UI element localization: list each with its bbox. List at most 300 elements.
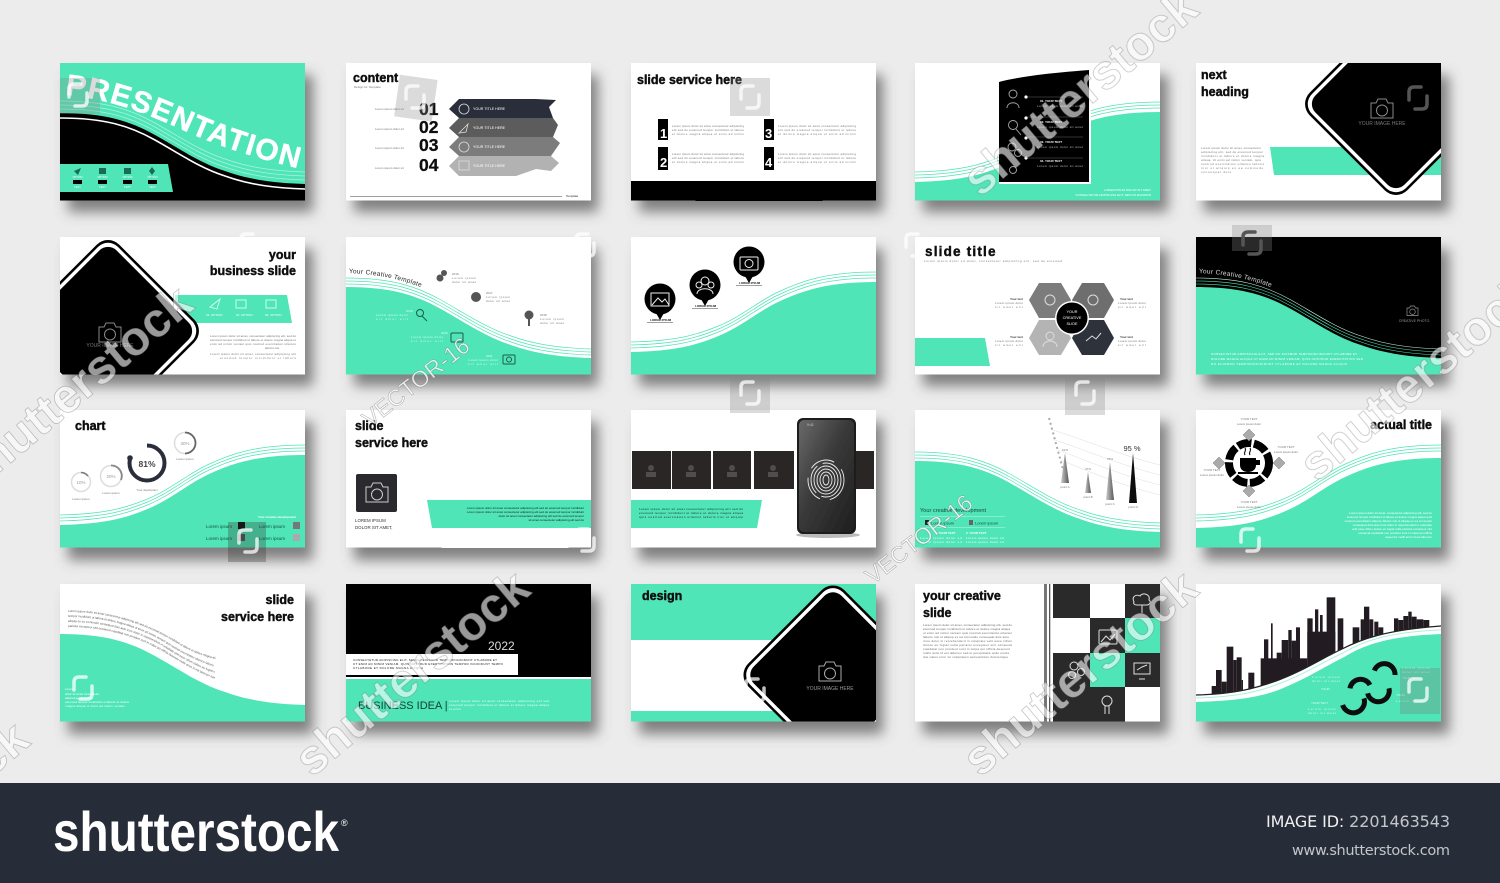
titles: slide	[266, 593, 294, 607]
body text: laboris nisi ut aliquip ex ea commodo consequat duis aute	[923, 635, 1009, 639]
diagram captions: Lorem ipsum dolor	[1200, 473, 1224, 477]
icon strip: OPTION	[73, 175, 83, 179]
phone: 9:41	[807, 423, 814, 427]
footer caption: LOREM IPSUM DOLOR SIT AMET	[1104, 188, 1151, 192]
mint band text: eiusmod tempor incididunt ut labore et dolore magna aliqua	[639, 511, 743, 515]
black list card	[999, 70, 1089, 182]
body text	[1345, 511, 1432, 539]
title: design	[642, 589, 682, 603]
panel: three circle icons slide	[631, 237, 876, 377]
diagram captions	[1200, 417, 1298, 509]
panel: chart slide: 30%	[180, 441, 190, 446]
body text: Lorem ipsum dolor sit amet, consectetur	[1201, 146, 1261, 150]
hexagon captions: Your text	[1010, 335, 1023, 339]
legend: Lorem ipsum	[206, 524, 232, 529]
circle markers	[644, 246, 764, 323]
coffee ring diagram	[1213, 429, 1285, 497]
icon strip: OPTION	[123, 175, 133, 179]
numbered list	[420, 102, 439, 172]
list captions	[375, 107, 404, 170]
caption: magna aliqua ut enim ad minim veniam	[65, 704, 126, 708]
panel: phone fingerprint slide	[631, 410, 876, 548]
hexagon diagram: CREATIVE	[1063, 316, 1082, 320]
panel: black infographic list slide: Lorem ipsum dolor sit amet	[1037, 125, 1083, 129]
panel: creative template timeline slide: 2021	[486, 354, 493, 358]
body text	[672, 124, 856, 164]
curved body text: aliquip ex ea commodo consequat duis aute irure dolor in reprehenderit in voluptate velit esse cillum dolore eu fugiat nulla	[68, 620, 215, 673]
body text: eiusmod tempor incididunt ut labore et dolore magna aliqua quis	[1347, 515, 1432, 519]
hexagon captions: Lorem ipsum dolor	[1118, 301, 1146, 305]
captions: Lorem ipsum	[1308, 707, 1336, 711]
panel: black infographic list slide: 03. YOUR TEXT	[1040, 140, 1062, 144]
hexagon captions: sit amet elit	[1118, 343, 1146, 347]
mint band text	[639, 507, 743, 519]
numbered list: 04	[419, 155, 439, 175]
checker grid	[1053, 584, 1160, 722]
body text: mollit anim id est laborum sed ut perspiciatis unde omnis	[923, 651, 1010, 655]
panel: next heading slide	[1196, 63, 1441, 200]
panel: creative template timeline slide	[346, 237, 591, 374]
panel: design slide: YOUR IMAGE HERE	[806, 686, 854, 692]
panel: business idea 2022 slide: ut enim	[449, 707, 462, 711]
timeline captions: Lorem ipsum	[452, 276, 476, 280]
panel: creative template timeline slide: Lorem ipsum dolor	[468, 358, 498, 362]
body text: et dolore magna aliqua ut enim ad minim	[778, 160, 856, 164]
panel: slide service here wave text	[60, 584, 305, 722]
timeline captions: dolor sit amet	[486, 299, 510, 303]
numbered blocks: 1	[660, 126, 667, 141]
body text: et dolore magna aliqua ut enim ad minim	[778, 132, 856, 136]
diagram captions: Lorem ipsum dolor	[1237, 422, 1261, 426]
triangle bars	[1060, 444, 1141, 509]
panel: chart slide: Lorem ipsum	[102, 491, 120, 495]
photo placeholder	[356, 474, 397, 512]
panel: presentation cover slide	[60, 63, 305, 200]
captions: YOUR	[1396, 693, 1406, 697]
body text: deserunt mollit anim id est laborum	[1385, 535, 1432, 539]
mint band with text: sit amet consectetur adipiscing elit sed do	[528, 518, 584, 522]
body text: et dolore magna aliqua ut enim ad minim	[672, 132, 744, 136]
body text	[923, 623, 1012, 659]
band icons: 02. OPTION	[236, 313, 253, 317]
title: slide title	[925, 244, 997, 259]
hexagon captions: Your text	[1120, 297, 1133, 301]
title: content	[353, 71, 399, 85]
body text: elit sed do eiusmod tempor incididunt ut labore	[778, 128, 856, 132]
body text: consequat duis aute irure dolor in reprehenderit in voluptate	[1353, 523, 1432, 527]
watermark: vector-16: VECTOR-16	[860, 489, 977, 589]
panel: black infographic list slide: 04. YOUR TEXT	[1040, 159, 1062, 163]
timeline icons	[436, 270, 534, 326]
panel: your creative slide checker grid	[915, 584, 1160, 722]
panel: slide title hexagon slide: Lorem ipsum dolor sit amet, consectetur adipiscing elit, sed do eiusmod	[924, 259, 1062, 263]
body text: iste natus error sit voluptatem accusantium doloremque	[923, 655, 1008, 659]
diagram captions: Lorem ipsum dolor	[1274, 450, 1298, 454]
body text: adipiscing elit, sed do eiusmod tempor	[1201, 150, 1263, 154]
numbered list: 03	[419, 135, 439, 155]
icon: fingerprint	[808, 460, 844, 500]
icon strip: OPTION	[148, 175, 158, 179]
panel: your business slide: YOUR IMAGE HERE	[86, 343, 134, 349]
titles	[210, 252, 296, 276]
panel: slide service here	[631, 63, 876, 201]
mint band with text	[427, 500, 591, 528]
title: actual title	[1370, 418, 1432, 432]
footer logo: shutterstock	[53, 800, 340, 863]
legend: Lorem ipsum	[259, 524, 285, 529]
mint band text: Lorem ipsum dolor sit amet consectetur adipiscing elit sed do	[639, 507, 743, 511]
panel: chart slide: Lorem ipsum	[176, 457, 194, 461]
curved body text	[68, 610, 216, 679]
image id: IMAGE ID: 2201463543	[1266, 812, 1450, 831]
captions	[1308, 666, 1430, 715]
body text: ut enim ad minim veniam quis nostrud exercitation ullamco	[923, 631, 1012, 635]
curved title: Your Creative Template	[1199, 268, 1272, 287]
triangle bars: 95 %	[1123, 444, 1141, 453]
timeline captions: 2017	[486, 291, 493, 295]
panel: chart slide: Lorem ipsum	[72, 497, 90, 501]
titles: your	[269, 248, 296, 262]
footer caption: CONSECTETUR ADIPISCING ELIT, SED DO EIUSMOD	[1075, 193, 1152, 197]
icon strip: OPTION	[98, 175, 108, 179]
body text: occaecat cupidatat non proident sunt in culpa qui officia	[1358, 531, 1432, 535]
panel: content slide: Design for Template	[354, 85, 381, 89]
body text: velit esse cillum dolore eu fugiat nulla pariatur excepteur sint	[1352, 527, 1432, 531]
hexagon captions: Lorem ipsum dolor	[995, 339, 1023, 343]
panel: actual title coffee diagram slide	[1196, 410, 1441, 553]
chart grid	[1049, 418, 1160, 495]
body text: et dolore magna aliqua ut enim ad minim	[672, 160, 744, 164]
panel: creative template timeline slide: sit amet elit	[411, 339, 443, 343]
mint band with text: Lorem ipsum dolor sit amet consectetur adipiscing elit sed do eiusmod tempor incididunt	[467, 506, 584, 510]
numbered blocks: 2	[660, 155, 667, 170]
chart legend: 2. YOUR TEXT	[966, 531, 987, 535]
list captions: Lorem ipsum dolor sit	[375, 107, 404, 111]
titles: heading	[1201, 85, 1249, 99]
curved body text: Lorem ipsum dolor sit amet consectetur adipiscing elit sed do eiusmod tempor incididunt ut labore et dolore magna aliqua ut enim	[68, 610, 216, 659]
hexagon captions: sit amet elit	[1118, 305, 1146, 309]
diagram captions: YOUR TEXT	[1240, 500, 1258, 504]
watermark: vector-16	[357, 332, 977, 589]
triangle bars: 75%	[1107, 457, 1113, 461]
image placeholder diamond	[737, 579, 929, 771]
body text	[210, 334, 296, 360]
panel: business idea 2022 slide: eiusmod tempor incididunt ut labore et dolore magna aliqua	[449, 703, 549, 707]
body text: Lorem ipsum dolor sit amet consectetur adipiscing	[778, 152, 856, 156]
timeline captions: dolor sit amet	[540, 321, 564, 325]
panel: dark creative template slide: CREATIVE PHOTO	[1399, 319, 1430, 323]
body text	[1211, 353, 1363, 366]
watermark: shutterstock diagonals: shutterstock	[953, 560, 1208, 786]
timeline captions: Lorem ipsum	[486, 295, 510, 299]
titles: business slide	[210, 264, 296, 278]
circle markers: LOREM IPSUM	[650, 318, 672, 322]
titles: your creative	[923, 589, 1001, 603]
captions: dolor sit amet	[1312, 679, 1340, 683]
panel: triangle bar chart slide	[915, 410, 1160, 551]
captions: YOUR	[1321, 687, 1331, 691]
band icons: 03. OPTION	[265, 313, 282, 317]
body text: elit sed do eiusmod tempor incididunt ut labore	[672, 128, 744, 132]
curved body text: pariatur excepteur sint occaecat cupidatat non proident sunt in culpa qui officia deserunt mollit anim id est laborum lorem	[68, 624, 215, 679]
panel: content slide	[346, 63, 591, 201]
white text box: CONSECTETUR ADIPISCING ELIT, SED DO EIUSMOD TEMPORINCIDIDUNT UTLABORE ET	[353, 658, 497, 662]
triangle bars: 61%	[1062, 448, 1068, 452]
city skyline	[1212, 597, 1429, 730]
captions: dolor sit amet	[1308, 711, 1336, 715]
panel: slide service photo block: DOLOR SIT AMET,	[355, 525, 392, 530]
diagram captions: YOUR TEXT	[1203, 468, 1221, 472]
panel: creative template timeline slide: sit amet elit	[376, 317, 408, 321]
caption: eiusmod tempor incididunt ut labore et dolore	[65, 700, 129, 704]
panel: creative template timeline slide: Lorem ipsum dolor	[411, 335, 443, 339]
numbered list: 01	[419, 99, 439, 119]
body text: nisi ut aliquip ex ea commodo	[1201, 166, 1263, 170]
panel: business idea 2022 slide	[346, 584, 591, 722]
panel: slide service photo block: LOREM IPSUM	[355, 518, 386, 523]
panel: black infographic list slide	[915, 63, 1160, 207]
chart legend	[920, 508, 1005, 544]
panel: dark creative template slide	[1196, 237, 1441, 374]
chart legend: 1. YOUR TEXT	[935, 531, 956, 535]
panel: black infographic list slide: 01. YOUR TEXT	[1040, 99, 1062, 103]
arrow stack: YOUR TITLE HERE	[473, 107, 506, 111]
caption: dolor sit amet consectetur	[65, 692, 99, 696]
icon strip: TEXT	[124, 185, 131, 189]
mint band text: quis nostrud exercitation ullamco laboris nisi ut aliquip	[639, 515, 743, 519]
arrow stack: YOUR TITLE HERE	[473, 126, 506, 130]
panel: next heading slide: YOUR IMAGE HERE	[1358, 121, 1406, 127]
body text: elit sed do eiusmod tempor incididunt ut labore	[778, 156, 856, 160]
panel: design slide	[631, 579, 929, 771]
titles: slide	[923, 606, 952, 620]
body text: consequat duis	[1201, 170, 1232, 174]
numbered blocks	[658, 119, 774, 170]
triangle bars: point D	[1128, 505, 1139, 509]
captions: Lorem ipsum	[1312, 675, 1340, 679]
body text: elit sed do eiusmod tempor incididunt ut labore	[672, 156, 744, 160]
arrow stack	[449, 99, 560, 176]
arrow stack: YOUR TITLE HERE	[473, 145, 506, 149]
slide drop shadows	[68, 75, 1449, 734]
hexagon captions: Lorem ipsum dolor	[995, 301, 1023, 305]
panel: content slide: Template	[566, 194, 579, 198]
titles	[221, 593, 294, 624]
captions: YOUR TEXT	[1311, 701, 1328, 705]
panel: slide title hexagon slide	[915, 237, 1160, 375]
caption: Lorem	[65, 687, 74, 691]
legend: Lorem ipsum	[206, 536, 232, 541]
panel: creative template timeline slide: Lorem ipsum dolor	[376, 313, 408, 317]
body text: Lorem ipsum dolor sit amet consectetur adipiscing	[672, 124, 744, 128]
list captions: Lorem ipsum dolor sit	[375, 146, 404, 150]
icon strip: TEXT	[99, 185, 106, 189]
body text: nostrud exercitation ullamco laboris nisi ut aliquip ex ea commodo	[1345, 519, 1432, 523]
body text: aliqua. Ut enim ad minim veniam, quis	[1201, 158, 1262, 162]
watermark: shutterstock diagonals: shutterstock	[285, 560, 540, 786]
titles: service here	[355, 436, 428, 450]
body text: incididunt ut labore et dolore magna	[1201, 154, 1264, 158]
curved title: Your Creative Template	[349, 268, 422, 287]
year: 2022	[488, 639, 515, 653]
panel: skyline slide	[1196, 584, 1441, 730]
panel: black infographic list slide: Lorem ipsum dolor sit amet	[1037, 145, 1083, 149]
icon strip: TEXT	[74, 185, 81, 189]
chain icon	[1343, 664, 1395, 713]
chart legend: Lorem ipsum dolor sit	[966, 540, 1004, 544]
body text: irure dolor in reprehenderit in voluptate velit esse cillum	[923, 639, 1013, 643]
panel: creative template timeline slide: 2019	[406, 309, 413, 313]
chart legend: Lorem ipsum dolor sit	[920, 540, 962, 544]
watermark: bracket logos	[60, 75, 1440, 714]
title: slide service here	[637, 73, 742, 87]
caption: adipiscing elit sed do	[65, 696, 93, 700]
footer caption	[1076, 189, 1151, 196]
body text: Lorem ipsum dolor sit amet, consectetur adipiscing elit	[210, 352, 296, 356]
band icons: 01. OPTION	[206, 313, 223, 317]
phone	[796, 418, 860, 538]
site url: www.shutterstock.com	[1292, 843, 1450, 859]
hexagon diagram	[1029, 283, 1114, 355]
hexagon captions: Your text	[1010, 297, 1023, 301]
photo strip	[632, 451, 874, 489]
body text: nostrud exercitation ullamco laboris	[1201, 162, 1265, 166]
panel: business idea 2022 slide: Lorem ipsum dolor sit amet consectetur adipiscing elit sed	[449, 699, 549, 703]
chart legend: Lorem ipsum dolor sit	[966, 536, 1004, 540]
panel: chart slide: 81%	[138, 459, 156, 469]
image placeholder diamond	[1305, 63, 1441, 195]
panel: chart slide: Your description	[136, 488, 158, 492]
footer title: BUSINESS IDEA |	[358, 700, 448, 712]
chart legend: Lorem ipsum	[931, 520, 955, 526]
hexagon diagram: YOUR	[1067, 310, 1078, 314]
footer bar: ®	[341, 818, 348, 828]
watermark: vector-16: VECTOR-16	[357, 332, 474, 432]
slide grid	[60, 63, 1441, 722]
triangle bars: point B	[1083, 495, 1093, 499]
chart legend: Lorem ipsum dolor sit	[920, 536, 962, 540]
curved title: PRESENTATION	[66, 74, 302, 168]
body text	[1201, 146, 1264, 174]
body text: Lorem ipsum dolor sit amet, consectetur adipiscing elit, sed do	[923, 623, 1012, 627]
body text: eiusmod tempor incididunt ut labore	[220, 356, 296, 360]
curved body text: tempor incididunt ut labore et dolore magna aliqua ut enim ad minim veniam quis nostrud exercitation ullamco laboris nisi ut	[68, 615, 214, 666]
panel: black infographic list slide: Lorem ipsum dolor sit amet	[1037, 104, 1083, 108]
hexagon captions: Your text	[1120, 335, 1133, 339]
panel: chart slide	[60, 410, 305, 550]
panel: chart slide: 20%	[106, 474, 116, 479]
body text: dolore eu fugiat nulla pariatur excepteur sint occaecat	[923, 643, 1012, 647]
diagram captions: YOUR TEXT	[1277, 445, 1295, 449]
timeline captions: Lorem ipsum	[540, 317, 564, 321]
panel: chart slide: 10%	[76, 480, 86, 485]
arrow stack: YOUR TITLE HERE	[473, 164, 506, 168]
hexagon captions: sit amet elit	[995, 343, 1023, 347]
timeline captions: 2016	[452, 272, 459, 276]
body text: CONSECTETUR ADIPISCING ELIT, SED DO EIUSMOD TEMPORINCIDIDUNT UTLABORE ET	[1211, 352, 1357, 356]
body text: Lorem ipsum dolor sit amet, consectetur adipiscing elit, sed do	[1349, 511, 1432, 515]
panel: black infographic list slide: Lorem ipsum dolor sit amet	[1037, 164, 1083, 168]
triangle bars: point C	[1105, 502, 1116, 506]
diagram captions: YOUR TEXT	[1240, 417, 1258, 421]
caption	[65, 687, 129, 708]
white text box	[346, 654, 518, 675]
mint band with text: Lorem ipsum dolor sit amet consectetur adipiscing elit sed do eiusmod tempor incididunt	[467, 510, 584, 514]
title: chart	[75, 419, 106, 433]
hexagon captions	[995, 297, 1146, 347]
numbered blocks: 3	[765, 126, 772, 141]
list captions: Lorem ipsum dolor sit	[375, 127, 404, 131]
titles: slide	[355, 419, 384, 433]
titles: next	[1201, 68, 1228, 82]
chart legend: Lorem ipsum	[975, 520, 999, 526]
titles	[923, 589, 1001, 620]
triangle bars: 37%	[1085, 467, 1091, 471]
circle markers: LOREM IPSUM	[739, 281, 761, 285]
circle markers: LOREM IPSUM	[695, 304, 717, 308]
panel: slide service photo block	[346, 410, 591, 548]
body text: eiusmod tempor incididunt ut labore et dolore magna aliqua	[923, 627, 1010, 631]
body text: DO EIUSMOD TEMPORINCIDIDUNT UTLABORE ET DOLORE MAGNA ALIQUA	[1211, 362, 1347, 366]
numbered blocks: 4	[765, 155, 773, 170]
titles: service here	[221, 610, 294, 624]
captions: Lorem ipsum	[1396, 699, 1424, 703]
body text: Lorem ipsum dolor sit amet, consectetur adipiscing elit, sed do	[210, 334, 296, 338]
panel: your business slide	[60, 237, 305, 374]
icon strip: TEXT	[149, 185, 156, 189]
titles	[355, 419, 428, 450]
grid icons	[1068, 594, 1150, 714]
body text: cupidatat non proident sunt in culpa qui officia deserunt	[923, 647, 1010, 651]
panel: creative template timeline slide: sit amet elit	[468, 362, 498, 366]
white text box: UTLABORE ET DOLORE MAGNA ALIQUA	[353, 666, 423, 670]
legend: Your creative development	[258, 515, 296, 519]
legend	[206, 515, 300, 541]
body text: Lorem ipsum dolor sit amet consectetur adipiscing	[672, 152, 744, 156]
timeline captions: dolor sit amet	[452, 280, 476, 284]
list captions: Lorem ipsum dolor sit	[375, 166, 404, 170]
body text: Lorem ipsum dolor sit amet consectetur adipiscing	[778, 124, 856, 128]
body text: laboris nisi	[265, 346, 280, 350]
legend: Lorem ipsum	[259, 536, 285, 541]
captions: YOUR TEXT	[1402, 676, 1419, 680]
panel: creative template timeline slide: 2020	[441, 331, 448, 335]
timeline captions: 2018	[540, 313, 547, 317]
body text: enim ad minim veniam quis nostrud exercitation ullamco	[210, 342, 296, 346]
captions: Lorem ipsum	[1402, 666, 1430, 670]
body text: DOLORE MAGNA ALIQUA UT ENIM AD MINIM VENIAM, QUIS NOSTRUD EXERCITATION SED	[1211, 357, 1364, 361]
chart legend: Your creative development	[920, 508, 986, 514]
white text box: UT ENIM AD MINIM VENIAM, QUIS NOSTRUD EXERCITATION TEMPOR INCIDIDUNT TEMPO	[353, 662, 504, 666]
band icons	[206, 299, 282, 317]
body text: eiusmod tempor incididunt ut labore et dolore magna aliqua ut	[210, 338, 296, 342]
wave	[1196, 626, 1441, 724]
captions: dolor sit amet	[1402, 670, 1430, 674]
titles	[1201, 68, 1249, 99]
triangle bars: point A	[1060, 485, 1070, 489]
hexagon captions: sit amet elit	[995, 305, 1023, 309]
timeline captions	[452, 272, 564, 325]
icon strip	[60, 164, 173, 192]
image placeholder diamond	[60, 240, 199, 374]
panel: black infographic list slide: 02. YOUR TEXT	[1040, 120, 1062, 124]
numbered list: 02	[419, 117, 439, 137]
hexagon diagram: SLIDE	[1067, 322, 1078, 326]
hexagon captions: Lorem ipsum dolor	[1118, 339, 1146, 343]
mint band with text: dolor sit amet consectetur adipiscing elit sed do eiusmod tempor	[499, 514, 584, 518]
footer bar	[0, 783, 1500, 883]
ring charts	[72, 432, 196, 492]
